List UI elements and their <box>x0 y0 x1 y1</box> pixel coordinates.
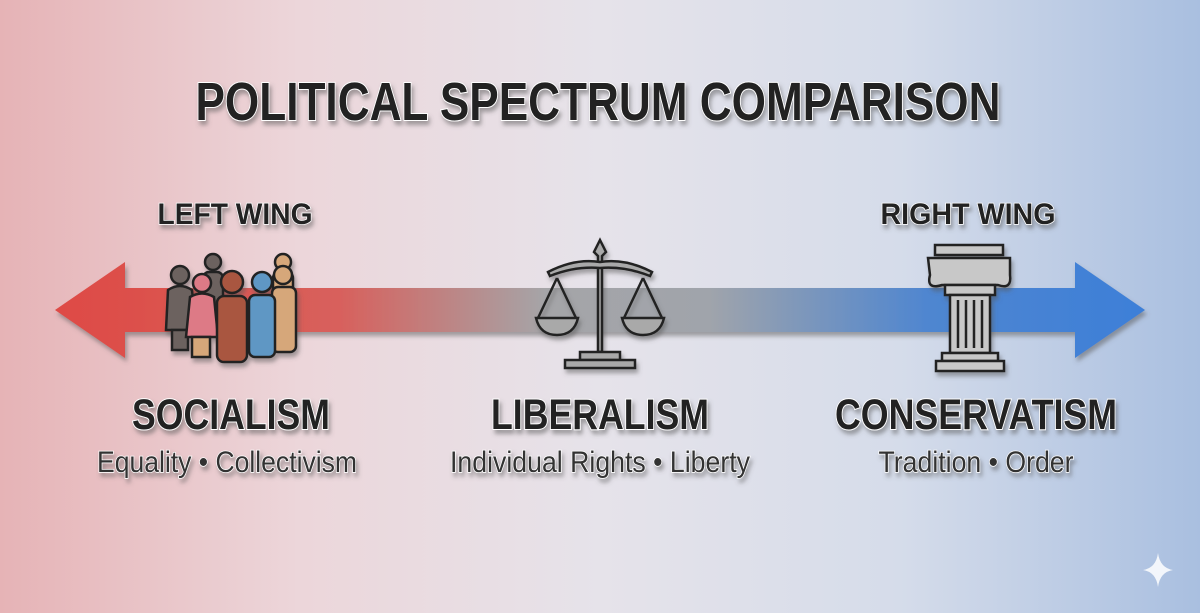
text: socialism: SOCIALISM <box>132 391 330 439</box>
icon: sparkle <box>1143 553 1173 587</box>
spectrum arrow <box>55 262 1145 358</box>
text: socialism <box>97 391 357 479</box>
icon: greek column <box>928 245 1010 371</box>
text: liberalism: Individual Rights • Liberty <box>450 446 750 479</box>
text: liberalism: LIBERALISM <box>491 391 709 439</box>
icon: people group <box>166 254 296 362</box>
label: right wing: RIGHT WING <box>880 198 1056 231</box>
icon: scales of justice <box>536 240 664 368</box>
text: conservatism <box>835 391 1117 479</box>
text: liberalism <box>450 391 750 479</box>
text: conservatism: CONSERVATISM <box>835 391 1117 439</box>
label: left wing: LEFT WING <box>158 198 312 231</box>
text: socialism: Equality • Collectivism <box>97 446 357 479</box>
title: POLITICAL SPECTRUM COMPARISON <box>196 72 1000 132</box>
text: conservatism: Tradition • Order <box>878 446 1074 479</box>
